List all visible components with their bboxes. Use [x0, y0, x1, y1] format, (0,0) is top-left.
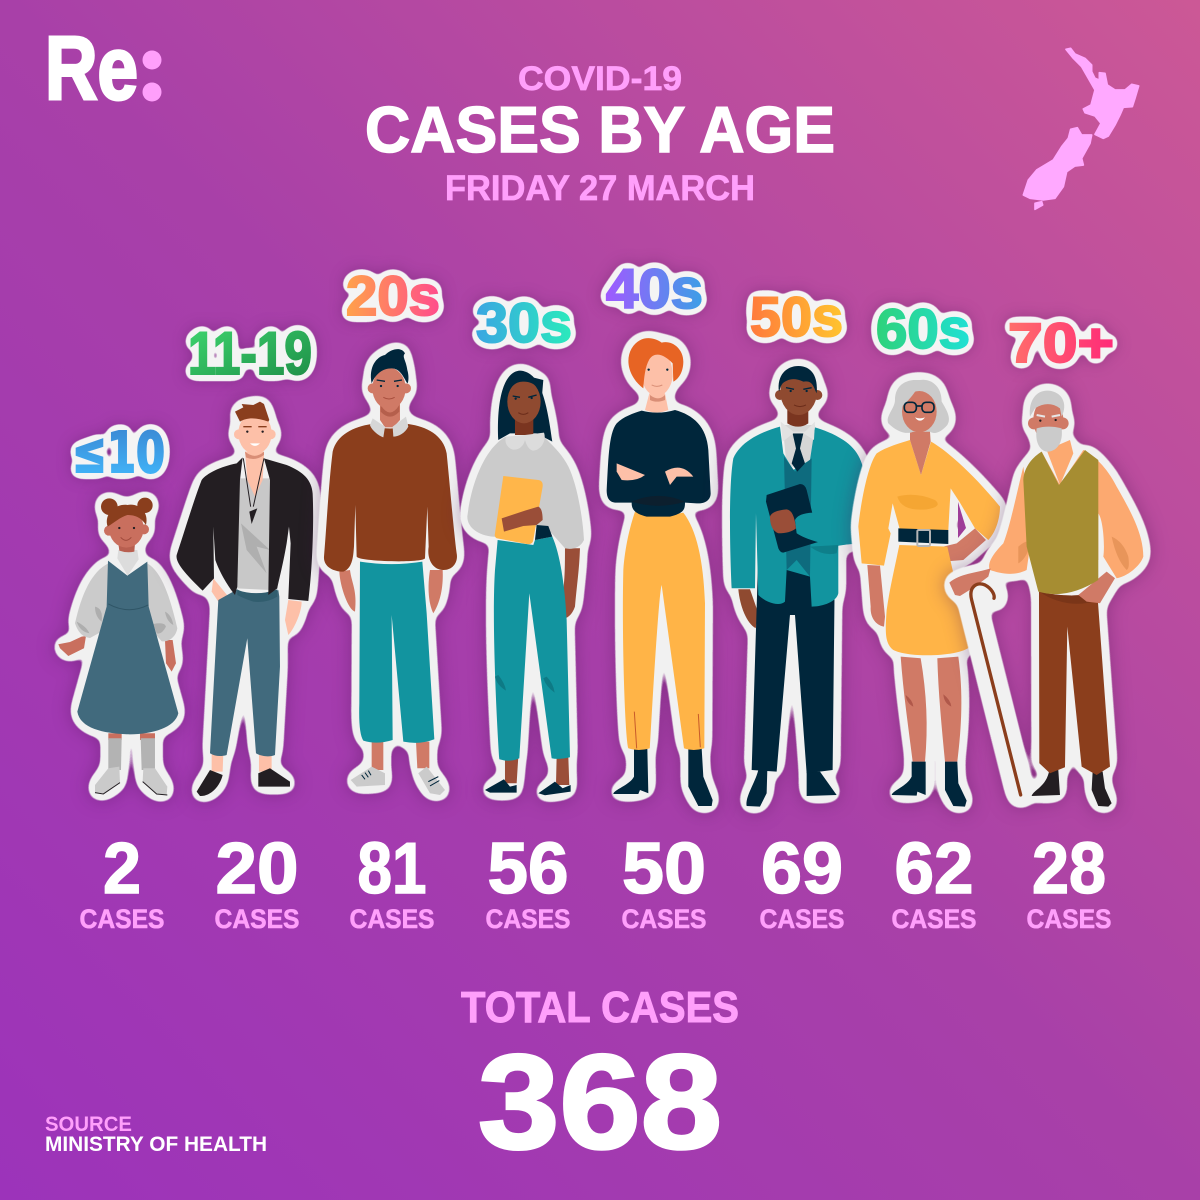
- 50s man head: [775, 366, 822, 442]
- figure: man in teal suit 50s: [730, 366, 865, 807]
- CASES captions: [80, 904, 1112, 934]
- figure: older woman in yellow dress 60s: [858, 380, 1000, 807]
- case counts per age group: 56: [488, 829, 568, 909]
- CASES captions: CASES: [622, 904, 706, 934]
- source: MINISTRY OF HEALTH: [45, 1133, 267, 1156]
- young man head and necklace: [234, 402, 276, 524]
- 20s man head: [368, 349, 411, 437]
- total cases: TOTAL CASES: [461, 983, 739, 1032]
- total cases: [461, 983, 739, 1177]
- case counts per age group: 62: [894, 829, 974, 909]
- case counts per age group: [103, 829, 1106, 909]
- CASES captions: CASES: [892, 904, 976, 934]
- age label: under 10: ≤10: [72, 421, 165, 486]
- arm gap: background showing through 60s figure's bent arm: [958, 502, 966, 538]
- CASES captions: CASES: [350, 904, 434, 934]
- 60s woman head: [888, 380, 949, 475]
- figure: woman with orange hair 40s: [607, 338, 713, 806]
- title block: COVID-19: [518, 60, 682, 98]
- 70+ man head: [1028, 391, 1069, 452]
- figure: man in brown sweater 20s: [324, 349, 457, 795]
- total cases: 368: [478, 1028, 722, 1177]
- logo: Re:: Re: [45, 19, 138, 119]
- case counts per age group: 2: [103, 829, 141, 909]
- 40s woman head: [628, 338, 683, 412]
- age label: 30s: 30s: [476, 291, 572, 354]
- figure: older man with cane 70+: [949, 391, 1143, 807]
- CASES captions: CASES: [760, 904, 844, 934]
- map: New Zealand: [1023, 48, 1139, 209]
- CASES captions: CASES: [80, 904, 164, 934]
- age label: 20s: 20s: [346, 264, 440, 327]
- source: SOURCE: [45, 1113, 132, 1136]
- age label: 50s: 50s: [750, 285, 843, 348]
- case counts per age group: 20: [216, 829, 298, 909]
- figure: girl under 10: [58, 498, 178, 795]
- CASES captions: CASES: [1026, 904, 1112, 934]
- case counts per age group: 69: [761, 829, 843, 909]
- age label: 11-19: 11-19: [188, 320, 312, 387]
- CASES captions: CASES: [214, 904, 300, 934]
- source: [45, 1113, 267, 1156]
- case counts per age group: 81: [358, 829, 426, 909]
- figure: woman with folder 30s: [467, 371, 584, 795]
- title block: CASES BY AGE: [365, 93, 835, 166]
- title block: FRIDAY 27 MARCH: [445, 169, 755, 208]
- age label: 70+: 70+: [1008, 311, 1114, 374]
- CASES captions: CASES: [486, 904, 570, 934]
- girl head: [101, 498, 153, 552]
- title block: [365, 60, 835, 208]
- case counts per age group: 28: [1032, 829, 1106, 909]
- age label: 60s: 60s: [876, 297, 970, 360]
- case counts per age group: 50: [622, 829, 706, 909]
- figure: young man 11-19: [177, 402, 313, 796]
- age label: 40s: 40s: [606, 257, 703, 320]
